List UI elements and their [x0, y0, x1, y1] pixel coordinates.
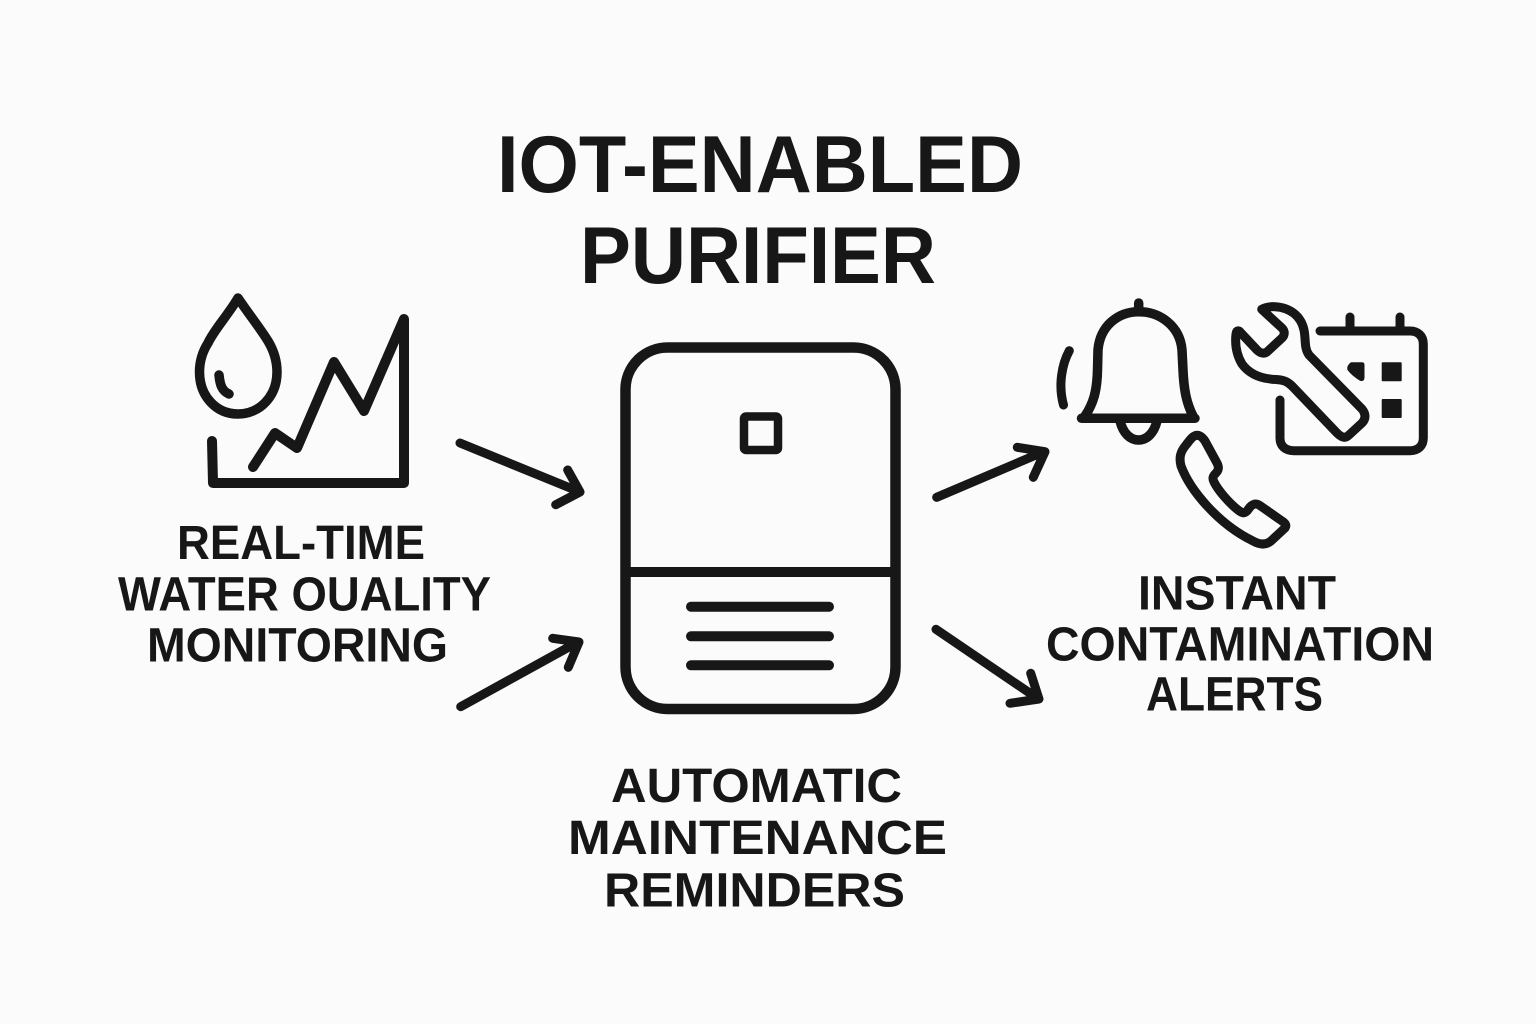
icon: calendar: [1280, 317, 1423, 451]
arrow: purifier to alerts (upper): [937, 447, 1045, 497]
label: real-time water quality monitoring: MONITORING: [147, 620, 448, 672]
title: PURIFIER: [580, 211, 936, 301]
arrow: purifier to alerts (lower): [936, 629, 1039, 703]
icon: line chart: [212, 319, 404, 483]
label: automatic maintenance reminders: [568, 760, 947, 918]
calendar date squares: [1347, 362, 1402, 418]
label: instant contamination alerts: CONTAMINATION: [1046, 618, 1434, 672]
icon: telephone: [1180, 435, 1286, 544]
icon: water drop: [200, 298, 277, 414]
label: automatic maintenance reminders: AUTOMATIC: [611, 760, 902, 813]
label: automatic maintenance reminders: MAINTENANCE: [568, 812, 947, 865]
device indicator square: [744, 416, 778, 450]
label: instant contamination alerts: ALERTS: [1146, 668, 1323, 722]
device vent lines: [691, 607, 829, 665]
label: instant contamination alerts: INSTANT: [1138, 568, 1336, 620]
title: IOT-ENABLED: [497, 120, 1023, 210]
arrow: monitoring to purifier (upper): [460, 443, 580, 505]
label: instant contamination alerts: [1046, 568, 1434, 722]
label: real-time water quality monitoring: [118, 517, 491, 672]
device divider: [625, 567, 896, 577]
icon: bell: [1061, 303, 1195, 440]
arrow: monitoring to purifier (lower): [461, 638, 579, 707]
label: automatic maintenance reminders: REMINDERS: [604, 864, 905, 918]
title: [497, 120, 1023, 301]
icon: purifier device: [625, 348, 896, 709]
icon: wrench: [1236, 307, 1365, 437]
label: real-time water quality monitoring: REAL-TIME: [177, 517, 425, 570]
label: real-time water quality monitoring: WATER OUALITY: [118, 568, 491, 622]
